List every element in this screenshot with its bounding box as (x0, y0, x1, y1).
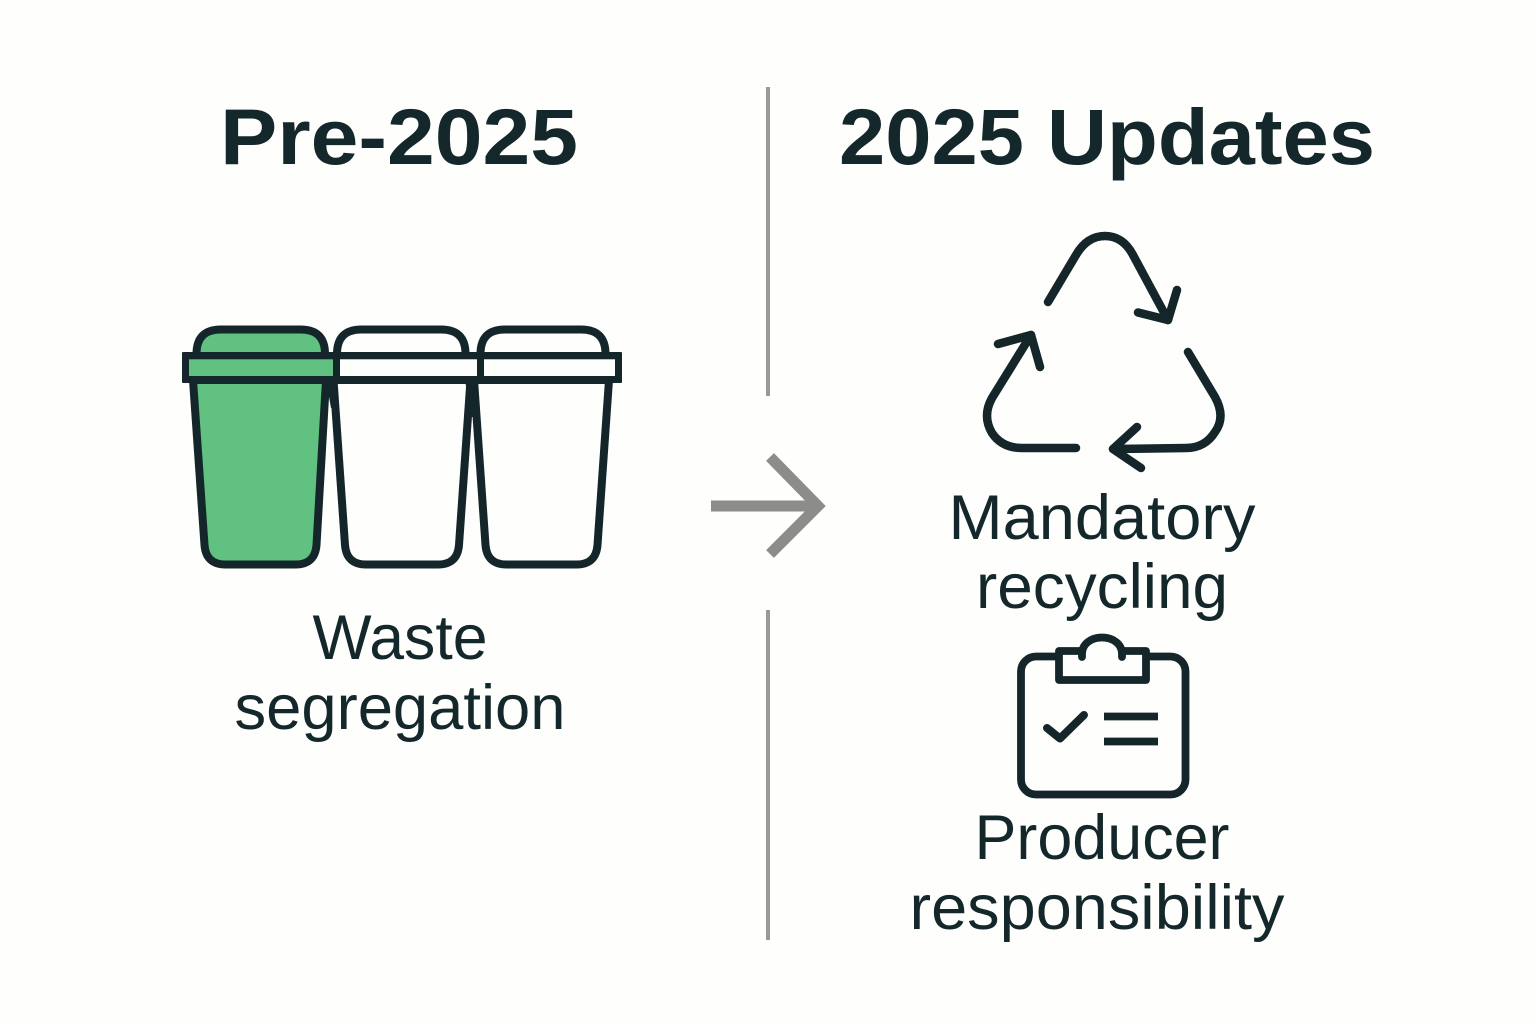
icon: three waste bins (182, 330, 622, 564)
icon: clipboard checklist (1021, 638, 1186, 794)
heading: Pre-2025: Pre-2025 (220, 92, 578, 181)
label: waste segregation: segregation (234, 673, 566, 743)
label: waste segregation (234, 603, 566, 743)
bin 2 (334, 330, 470, 564)
bin lids band (182, 352, 622, 417)
bin 3 (474, 330, 609, 564)
bin 1 green (193, 330, 326, 564)
label: producer responsibility: Producer (974, 803, 1230, 873)
arrow: pre-2025 to 2025 (711, 457, 818, 554)
label: mandatory recycling: recycling (976, 552, 1228, 622)
icon: recycling arrows (987, 236, 1220, 468)
label: producer responsibility: responsibility (910, 873, 1285, 943)
label: producer responsibility (910, 803, 1285, 943)
label: mandatory recycling (948, 483, 1256, 622)
label: waste segregation: Waste (312, 603, 488, 673)
label: mandatory recycling: Mandatory (948, 483, 1256, 553)
heading: 2025 Updates: 2025 Updates (839, 92, 1375, 181)
